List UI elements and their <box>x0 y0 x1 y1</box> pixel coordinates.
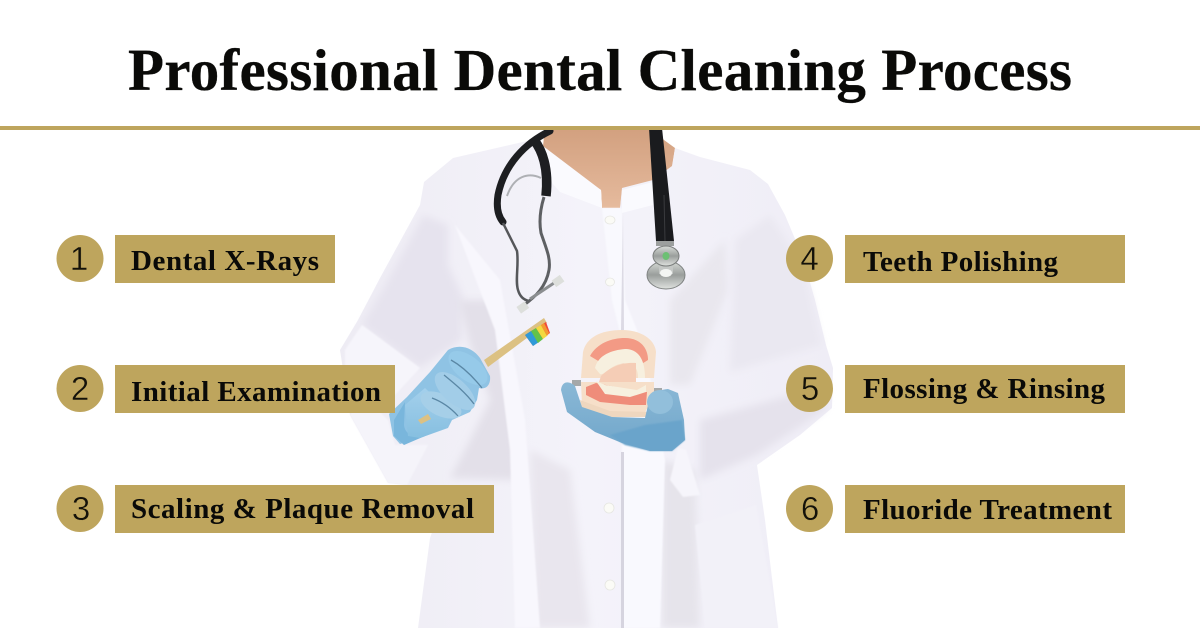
label 5 <box>845 365 1125 413</box>
number badge 2: 2 <box>71 370 89 407</box>
toothbrush <box>484 318 550 367</box>
label 3 <box>115 485 494 533</box>
right gloved hand <box>561 382 685 451</box>
white coat body <box>340 141 833 628</box>
step 2 <box>56 365 395 413</box>
stethoscope chestpiece <box>647 241 685 289</box>
coat buttons <box>604 216 615 590</box>
number badge 3 <box>56 485 104 532</box>
label 3: Scaling & Plaque Removal <box>131 493 474 525</box>
neck and chest skin <box>543 128 675 210</box>
step 4 <box>786 235 1125 283</box>
left gloved hand <box>389 344 494 445</box>
coat shading <box>345 146 828 628</box>
number badge 3: 3 <box>72 490 90 527</box>
placket <box>602 208 665 628</box>
label 6 <box>845 485 1125 533</box>
number badge 4: 4 <box>800 240 819 277</box>
number badge 4 <box>786 235 833 282</box>
number badge 2 <box>56 365 104 412</box>
label 2 <box>115 365 395 413</box>
photo: doctor in white coat <box>340 128 833 628</box>
title: Professional Dental Cleaning Process <box>128 37 1072 103</box>
bright panels <box>455 225 540 628</box>
number badge 6 <box>786 485 833 532</box>
step 3 <box>56 485 494 533</box>
label 5: Flossing & Rinsing <box>863 373 1106 405</box>
label 1: Dental X-Rays <box>131 245 319 277</box>
label 4 <box>845 235 1125 283</box>
number badge 5 <box>786 365 833 412</box>
label 1 <box>115 235 335 283</box>
number badge 5: 5 <box>801 370 819 407</box>
number badge 6: 6 <box>801 490 819 527</box>
dentures model <box>572 330 662 417</box>
step 1 <box>56 235 335 283</box>
label 6: Fluoride Treatment <box>863 494 1112 526</box>
label 4: Teeth Polishing <box>863 246 1058 278</box>
step 5 <box>786 365 1125 413</box>
stethoscope <box>497 128 674 314</box>
step 6 <box>786 485 1125 533</box>
label 2: Initial Examination <box>131 376 381 408</box>
divider rule <box>0 126 1200 130</box>
number badge 1: 1 <box>70 240 88 277</box>
number badge 1 <box>56 235 104 282</box>
